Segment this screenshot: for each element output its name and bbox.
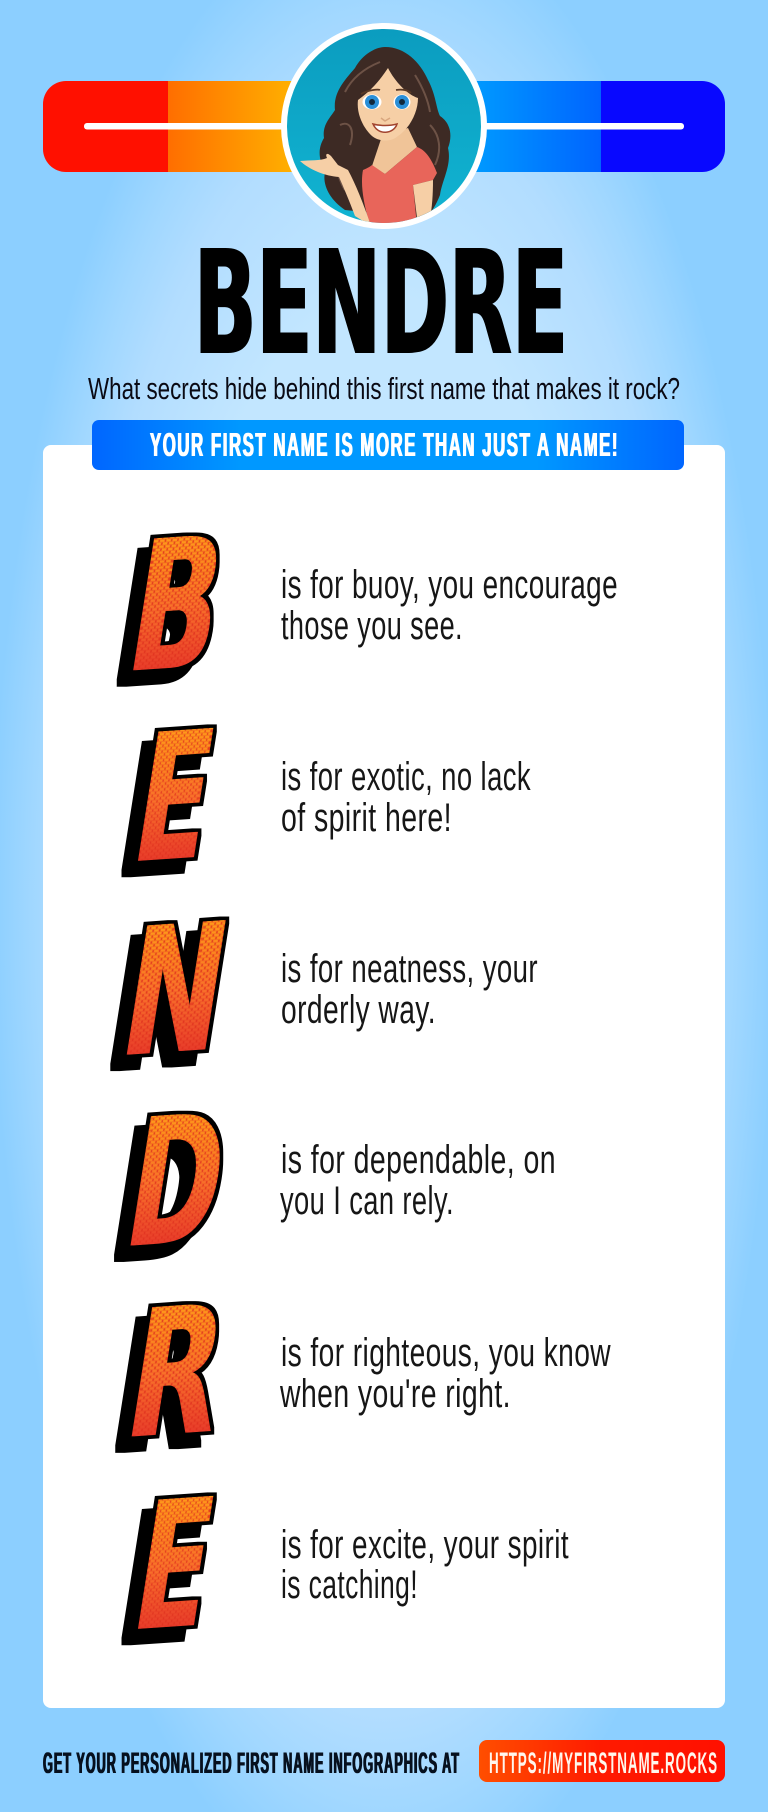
text: D line: is for dependable, on (281, 1138, 556, 1182)
footer url button (479, 1740, 725, 1782)
text: B line: is for buoy, you encourage (281, 563, 618, 607)
text: R line: when you're right. (279, 1372, 511, 1416)
hair (320, 47, 450, 218)
letter B: B (117, 496, 237, 714)
text: E second line: is catching! (281, 1563, 418, 1607)
letter row: N (110, 884, 538, 1097)
nose (381, 118, 390, 121)
letter E: E (123, 692, 227, 904)
avatar: cartoon woman in circle (284, 26, 484, 226)
letter row: B (117, 496, 618, 714)
hair highlights (332, 62, 439, 190)
text: E line: of spirit here! (281, 796, 452, 840)
letter N: N (110, 884, 241, 1097)
letter row: E (123, 692, 531, 904)
text: R line: is for righteous, you know (281, 1331, 611, 1375)
letter E second: E (123, 1460, 227, 1672)
letter row: E second (123, 1460, 569, 1672)
right arm (413, 180, 433, 218)
face (358, 68, 418, 141)
neck (372, 128, 417, 174)
text: D line: you I can rely. (280, 1179, 454, 1223)
letter row: D (115, 1077, 556, 1289)
banner (92, 420, 684, 470)
text: N line: orderly way. (281, 988, 436, 1032)
text: E line: is for exotic, no lack (281, 755, 531, 799)
letter row: R (115, 1266, 611, 1479)
left arm and hand (300, 154, 371, 226)
letter D: D (115, 1077, 238, 1289)
shirt (362, 147, 437, 226)
mouth (373, 124, 397, 132)
panel: white content card (43, 445, 725, 1708)
text: N line: is for neatness, your (281, 947, 538, 991)
letter R: R (115, 1266, 238, 1479)
eyes (362, 94, 382, 110)
text: E second line: is for excite, your spirit (281, 1523, 569, 1567)
header bar (43, 81, 725, 172)
brows (361, 90, 411, 94)
text: B line: those you see. (281, 604, 463, 648)
